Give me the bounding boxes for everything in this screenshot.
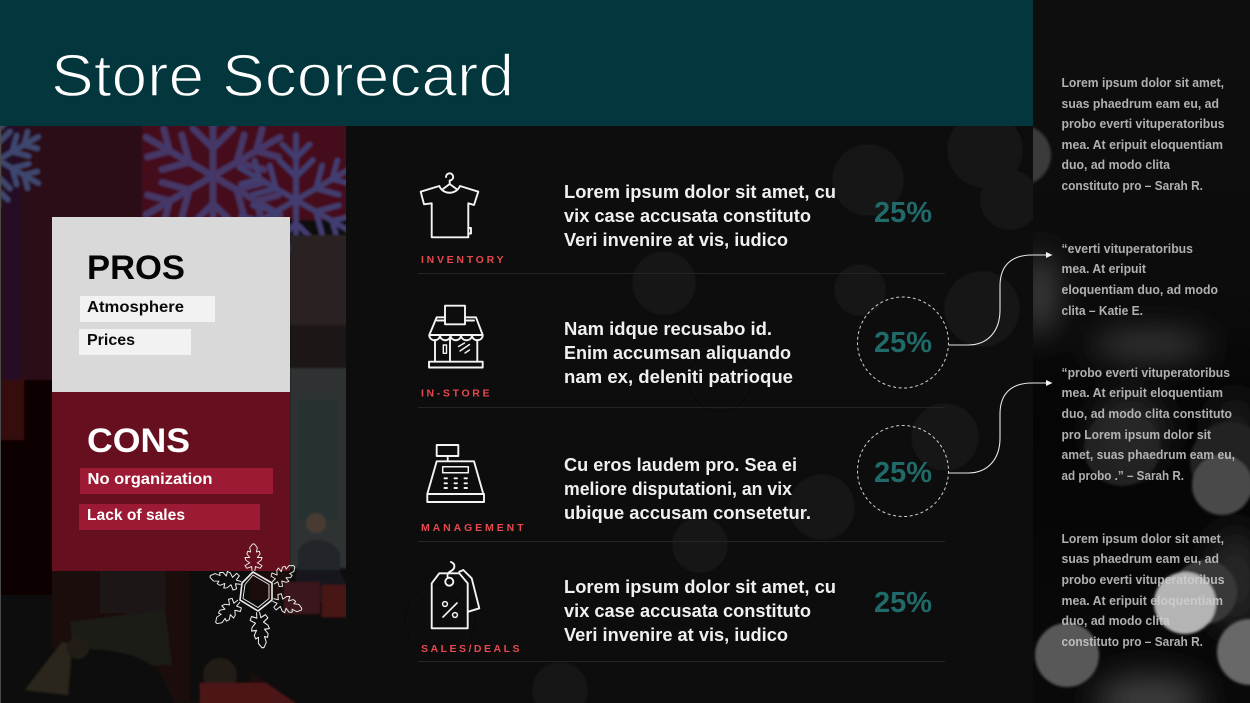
testimonial 4: constituto pro – Sarah R.: [1062, 635, 1203, 649]
testimonial 1: Lorem ipsum dolor sit amet,: [1062, 76, 1224, 90]
testimonial 4: suas phaedrum eam eu, ad: [1062, 552, 1219, 566]
description: vix case accusata constituto: [564, 601, 811, 621]
testimonial 1: constituto pro – Sarah R.: [1062, 179, 1203, 193]
value: 25%: [874, 587, 932, 619]
icon: price tags: [432, 562, 479, 628]
item: prices: [79, 329, 191, 355]
testimonial 4: Lorem ipsum dolor sit amet,: [1062, 532, 1224, 546]
arrow: management to Sarah R. quote: [949, 380, 1052, 473]
testimonial 3: mea. At eripuit eloquentiam: [1062, 386, 1223, 400]
row: management: [421, 426, 948, 534]
testimonial 3: pro Lorem ipsum dolor sit: [1062, 428, 1212, 442]
item: lack of sales: [79, 504, 260, 530]
panel: cons: [52, 392, 290, 571]
label: sales/deals: SALES/DEALS: [421, 643, 520, 655]
testimonial 4: duo, ad modo clita: [1062, 614, 1171, 628]
description: Cu eros laudem pro. Sea ei: [564, 455, 797, 475]
description: [564, 577, 836, 645]
testimonial 3: ad probo .” – Sarah R.: [1062, 469, 1184, 483]
description: Veri invenire at vis, iudico: [564, 230, 788, 250]
item: lack of sales: Lack of sales: [87, 507, 185, 524]
icon: storefront: [429, 306, 483, 368]
value with dashed ring: 25%: [874, 457, 932, 489]
description: ubique accusam consetetur.: [564, 503, 811, 523]
background bokeh: main panel: [406, 112, 1040, 703]
description: [564, 182, 836, 250]
item: atmosphere: [80, 296, 215, 322]
icon: t-shirt on hanger: [421, 173, 478, 237]
testimonial 3: “probo everti vituperatoribus: [1062, 366, 1230, 380]
label: in-store: IN-STORE: [421, 388, 490, 400]
testimonial 2: [1062, 242, 1218, 318]
icon: snowflake: [208, 544, 304, 649]
testimonial 2: clita – Katie E.: [1062, 304, 1143, 318]
value with dashed ring: [858, 297, 948, 388]
description: Enim accumsan aliquando: [564, 343, 791, 363]
testimonial 2: eloquentiam duo, ad modo: [1062, 283, 1218, 297]
description: Veri invenire at vis, iudico: [564, 625, 788, 645]
testimonial 3: amet, suas phaedrum eam eu,: [1062, 448, 1235, 462]
header band: [0, 0, 1033, 126]
testimonial 1: probo everti vituperatoribus: [1062, 117, 1224, 131]
panel: pros: [52, 217, 290, 392]
panel: photo of store window: [0, 98, 361, 703]
heading: pros: PROS: [87, 249, 185, 287]
testimonial 4: [1062, 532, 1224, 649]
panel: right testimonials background: [1033, 126, 1250, 703]
description: [564, 319, 793, 387]
testimonial 3: duo, ad modo clita constituto: [1062, 407, 1232, 421]
description: Nam idque recusabo id.: [564, 319, 772, 339]
description: meliore disputationi, an vix: [564, 479, 792, 499]
description: vix case accusata constituto: [564, 206, 811, 226]
description: Lorem ipsum dolor sit amet, cu: [564, 577, 836, 597]
item: prices: Prices: [87, 332, 135, 349]
testimonial 1: [1062, 76, 1224, 193]
testimonial 1: suas phaedrum eam eu, ad: [1062, 97, 1219, 111]
heading: cons: CONS: [87, 422, 190, 460]
row: in-store: [421, 297, 948, 400]
testimonial 2: mea. At eripuit: [1062, 262, 1147, 276]
row: inventory: [421, 173, 932, 266]
testimonial 4: probo everti vituperatoribus: [1062, 573, 1224, 587]
title: Store Scorecard: [51, 43, 514, 109]
value: 25%: [874, 197, 932, 229]
row: sales and deals: [421, 562, 932, 655]
item: no organization: [80, 468, 273, 494]
value with dashed ring: 25%: [874, 327, 932, 359]
description: nam ex, deleniti patrioque: [564, 367, 793, 387]
icon: cash register: [427, 445, 484, 502]
testimonial 2: “everti vituperatoribus: [1062, 242, 1193, 256]
arrow: in-store to Katie E. quote: [949, 252, 1052, 345]
testimonial 4: mea. At eripuit eloquentiam: [1062, 594, 1223, 608]
description: [564, 455, 811, 523]
label: inventory: INVENTORY: [421, 254, 504, 266]
testimonial 1: mea. At eripuit eloquentiam: [1062, 138, 1223, 152]
label: management: MANAGEMENT: [421, 522, 524, 534]
description: Lorem ipsum dolor sit amet, cu: [564, 182, 836, 202]
testimonial 1: duo, ad modo clita: [1062, 158, 1171, 172]
testimonial 3: [1062, 366, 1235, 483]
item: no organization: No organization: [88, 471, 212, 488]
value with dashed ring: [858, 426, 948, 516]
row separators: [418, 274, 945, 662]
item: atmosphere: Atmosphere: [87, 299, 184, 316]
